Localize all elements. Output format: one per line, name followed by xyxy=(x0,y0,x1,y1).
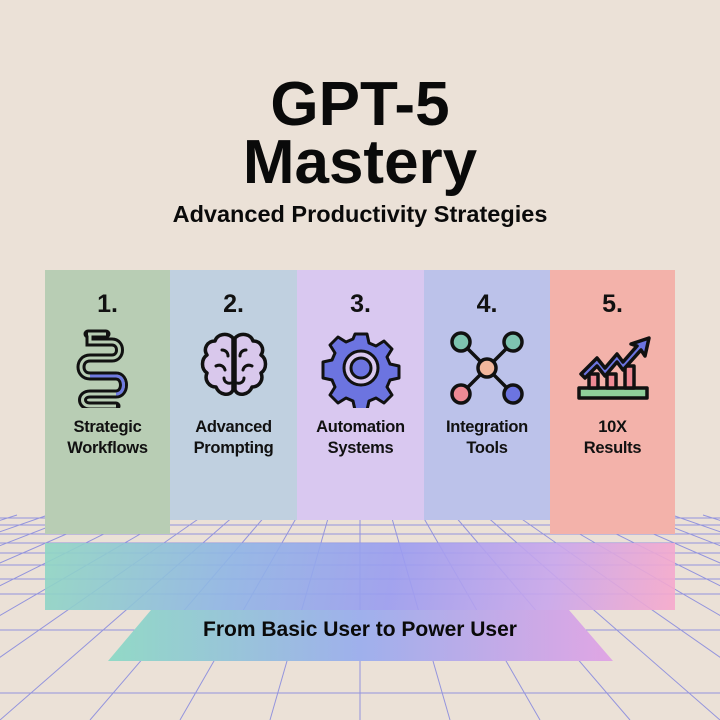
icon: network nodes xyxy=(450,331,524,405)
panel 5: 10X Results: 10X xyxy=(598,418,627,436)
icon: gear xyxy=(322,332,400,408)
panel 2: Advanced Prompting: Advanced xyxy=(195,418,272,436)
title xyxy=(243,70,477,197)
icon: workflow path xyxy=(76,330,128,408)
gradient band xyxy=(45,543,675,610)
panel 5: 10X Results: 5. xyxy=(602,290,623,318)
panel 4: Integration Tools xyxy=(424,270,550,520)
title: GPT-5 xyxy=(270,70,450,139)
panel 5: 10X Results xyxy=(550,270,675,534)
panel 3: Automation Systems xyxy=(297,270,424,520)
panel 4: Integration Tools: Tools xyxy=(466,439,508,457)
panel 4: Integration Tools: Integration xyxy=(446,418,528,436)
title: Mastery xyxy=(243,128,477,197)
subtitle: Advanced Productivity Strategies xyxy=(173,201,547,227)
panel 2: Advanced Prompting: Prompting xyxy=(194,439,273,457)
panel 1: Strategic Workflows: Workflows xyxy=(67,439,148,457)
panel 3: Automation Systems: Systems xyxy=(328,439,393,457)
panel 3: Automation Systems: Automation xyxy=(316,418,405,436)
icon: brain xyxy=(200,332,268,396)
panel 3: Automation Systems: 3. xyxy=(350,290,371,318)
panel 2: Advanced Prompting xyxy=(170,270,297,520)
banner: From Basic User to Power User: From Basic User to Power User xyxy=(203,618,517,641)
icon: growth chart xyxy=(577,336,651,400)
banner: From Basic User to Power User xyxy=(108,610,613,661)
panel 2: Advanced Prompting: 2. xyxy=(223,290,244,318)
panel 1: Strategic Workflows xyxy=(45,270,170,534)
panel 1: Strategic Workflows: Strategic xyxy=(74,418,141,436)
panel 5: 10X Results: Results xyxy=(584,439,641,457)
panel 4: Integration Tools: 4. xyxy=(477,290,497,318)
panel 1: Strategic Workflows: 1. xyxy=(97,290,118,318)
